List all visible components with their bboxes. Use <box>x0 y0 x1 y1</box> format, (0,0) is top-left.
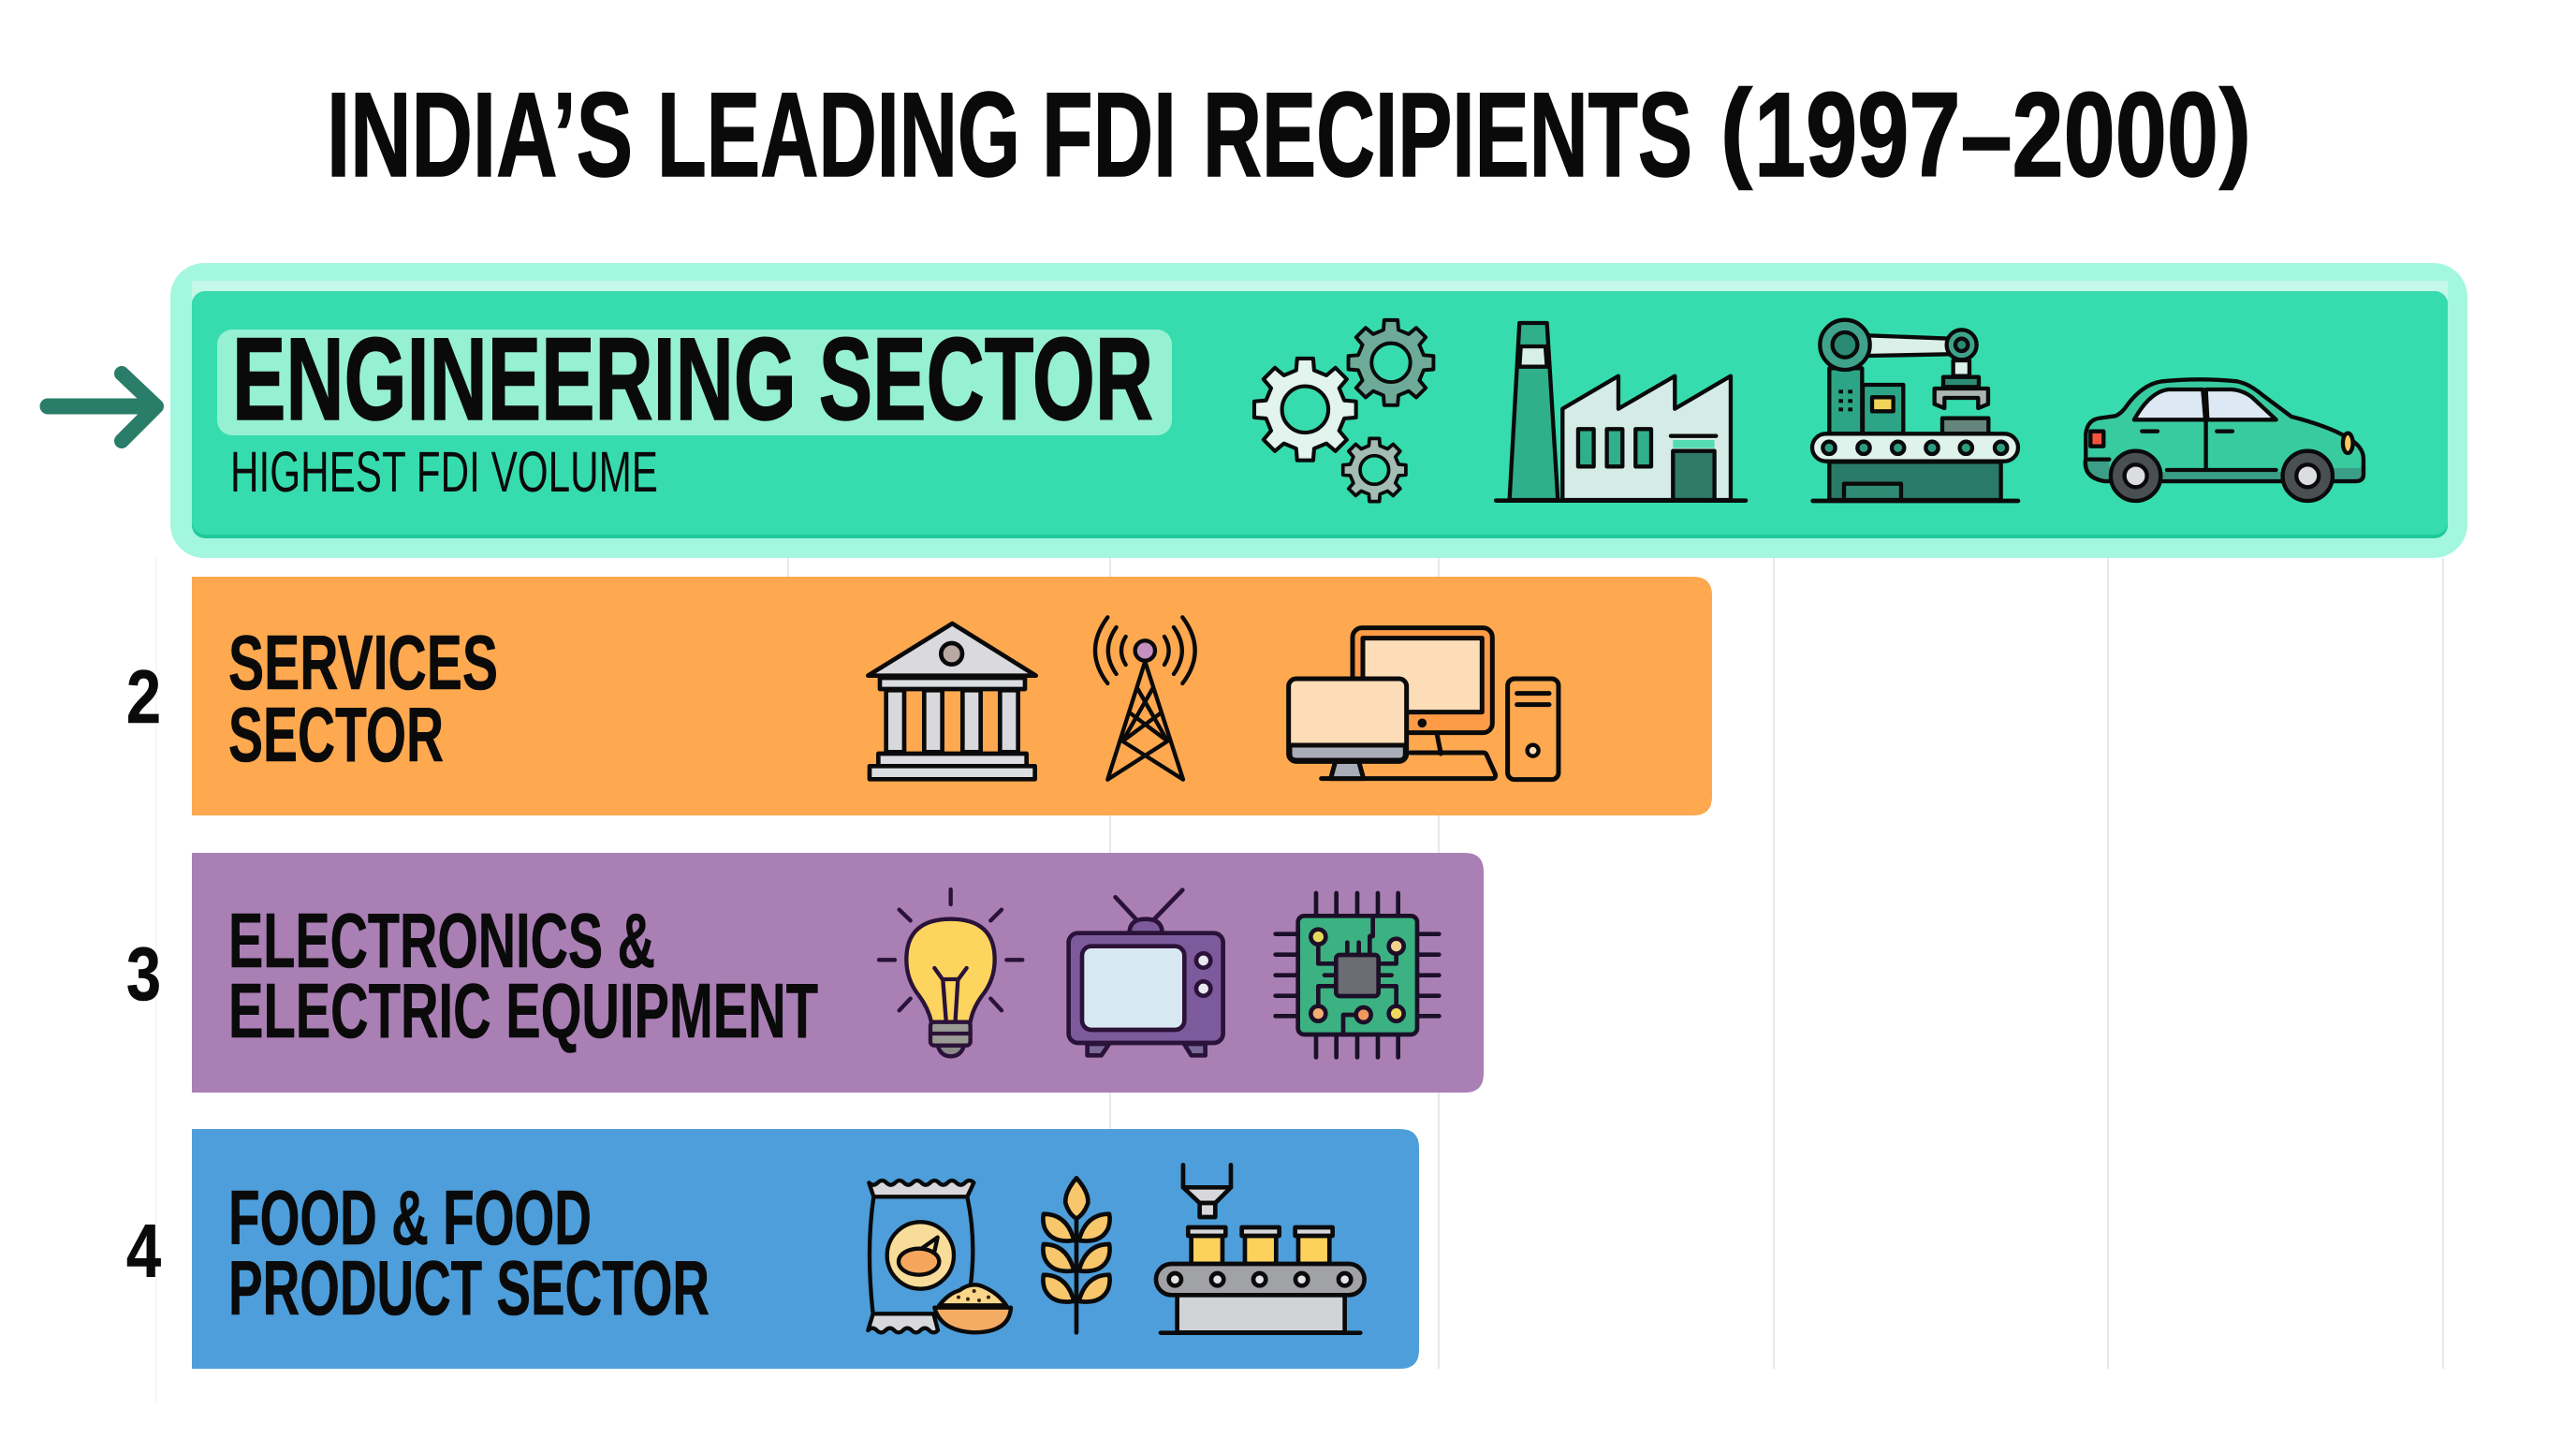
label: food and food product sector: PRODUCT SECTOR <box>228 1244 710 1331</box>
icon: food production conveyor <box>1156 1165 1365 1333</box>
icon: telecom tower <box>1095 617 1195 780</box>
label: services sector: SERVICES <box>228 619 498 706</box>
panel: engineering sector bar <box>170 263 2467 558</box>
label: electronics and electric equipment: ELECTRIC EQUIPMENT <box>228 967 818 1054</box>
engineering heading highlight <box>217 330 1172 435</box>
label: electronics and electric equipment: ELECTRONICS & <box>228 897 655 984</box>
icon: television <box>1069 890 1223 1055</box>
title: ( <box>1720 67 1753 191</box>
title: LEADING <box>657 68 1020 202</box>
panel: electronics and electric equipment bar <box>126 853 1484 1093</box>
icon: gears <box>1254 320 1433 502</box>
icon: wheat <box>1043 1178 1110 1332</box>
arrow pointing to rank 1 <box>48 374 156 441</box>
icon: car <box>2086 379 2364 501</box>
panel: food and food product sector bar <box>126 1129 1419 1369</box>
icon: computers <box>1289 628 1559 780</box>
icon: bank <box>868 624 1036 779</box>
title: RECIPIENTS <box>1203 68 1692 202</box>
title: ) <box>2219 67 2251 191</box>
icon: factory <box>1496 323 1746 501</box>
icon: circuit chip <box>1276 893 1439 1057</box>
rank number 3: 3 <box>126 932 161 1017</box>
icon: robotic arm on conveyor <box>1812 320 2018 501</box>
rank number 4: 4 <box>126 1210 161 1294</box>
label: services sector: SECTOR <box>228 691 444 778</box>
subheading: highest FDI volume: HIGHEST FDI VOLUME <box>230 440 658 504</box>
title: INDIA’S <box>327 68 633 202</box>
icon: light bulb <box>879 889 1022 1056</box>
rank number 2: 2 <box>126 655 161 740</box>
heading: engineering sector: ENGINEERING SECTOR <box>232 315 1153 445</box>
title: 1997–2000 <box>1754 68 2218 202</box>
icon: food packet with bowl <box>868 1181 1011 1332</box>
title: FDI <box>1042 68 1177 202</box>
panel: services sector bar <box>126 577 1712 815</box>
label: food and food product sector: FOOD & FOOD <box>228 1174 592 1261</box>
